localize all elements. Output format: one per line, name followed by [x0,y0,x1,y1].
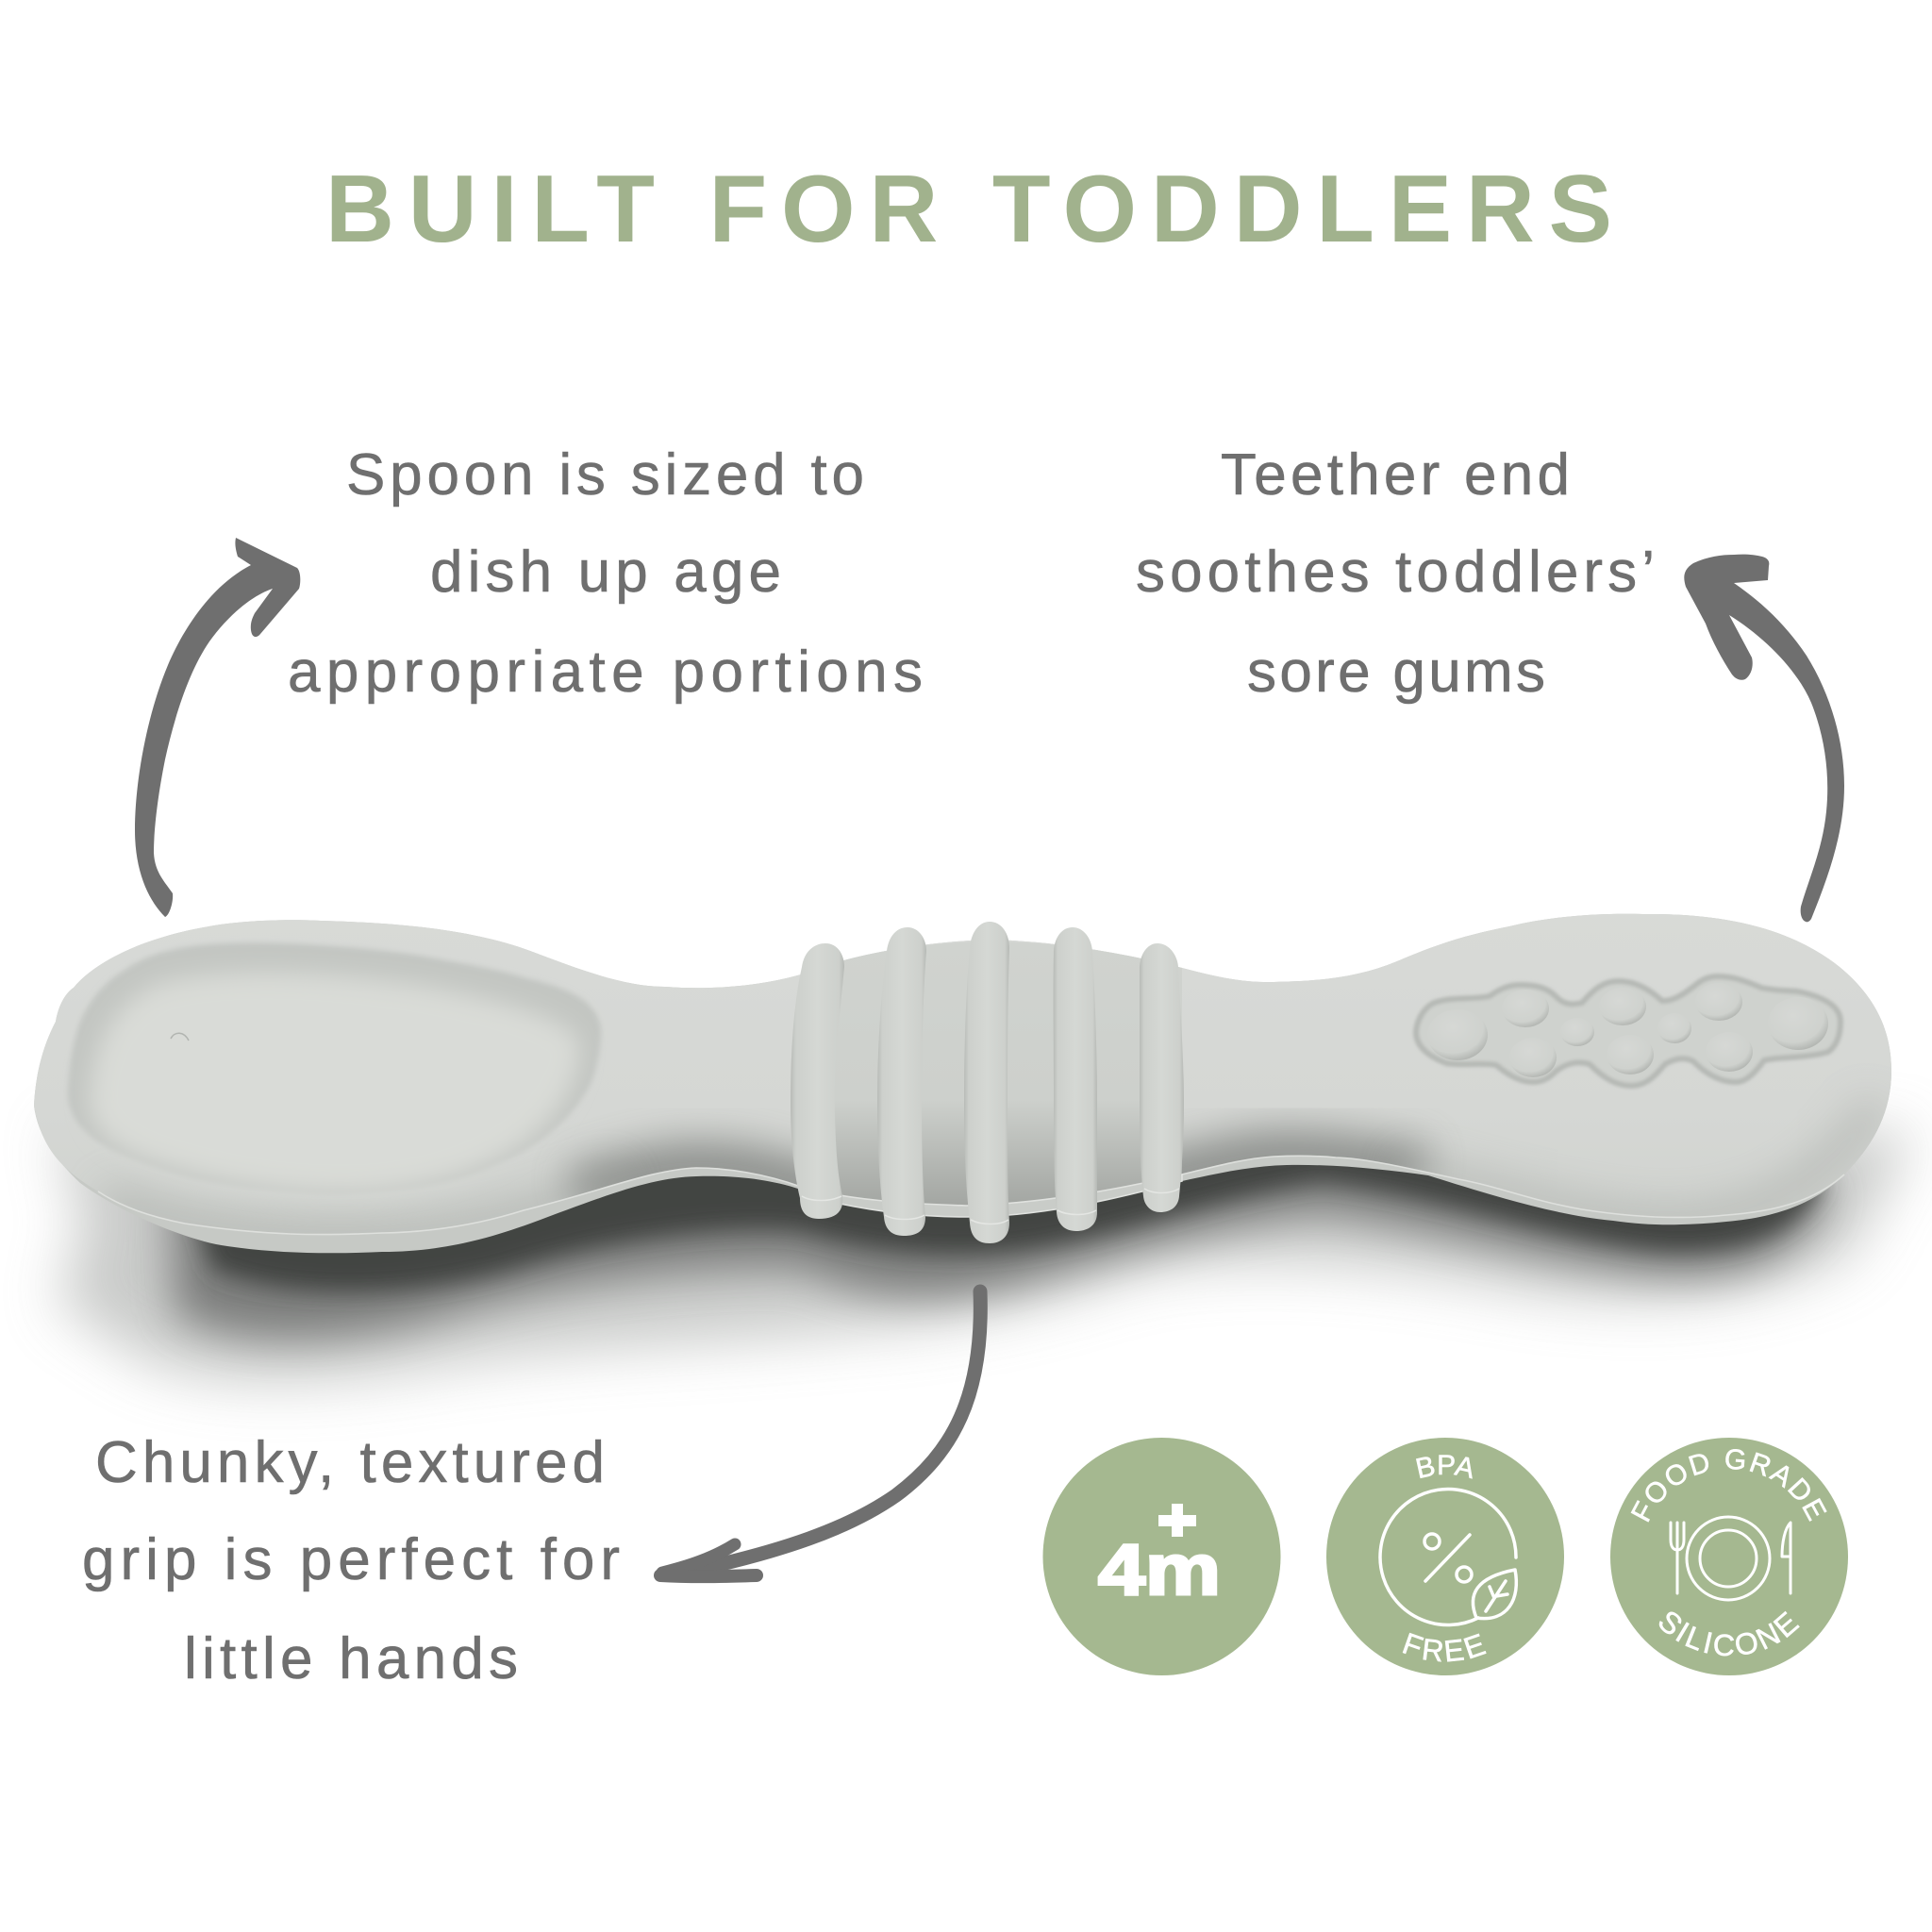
text block: chunky grip: little hands [184,1626,518,1691]
arrow: to teether text [1684,555,1844,922]
grip ribs [791,922,1184,1243]
shadow under spoon [57,1132,1915,1381]
arrow: to spoon text [135,538,300,917]
rim highlight line [98,1156,1844,1235]
bowl interior [68,942,601,1194]
text block: chunky grip: grip is perfect for [82,1527,620,1592]
text block: teether end: Teether end [1221,442,1570,508]
text block: teether end: sore gums [1247,640,1545,705]
badge: food grade silicone: SILICONE [1658,1611,1800,1657]
text block: spoon size: dish up age [430,540,781,605]
badge: BPA free: BPA [1416,1455,1473,1479]
spoon [0,896,1932,1255]
grip body [801,941,1182,1206]
badge: 4m+ [1043,1438,1281,1675]
badge: BPA free: FREE [1402,1632,1487,1662]
icon: percent circle with leaf [1380,1490,1516,1625]
rib rim lines [802,1189,1179,1224]
text block: teether end [1136,442,1655,705]
text block: spoon size: Spoon is sized to [346,442,864,508]
badge: food grade silicone: FOOD GRADE [1630,1449,1827,1523]
arrow: to grip text [660,1291,980,1576]
grip lower band [801,1174,1182,1217]
icon: plate and cutlery [1671,1517,1790,1600]
text block: chunky grip: Chunky, textured [95,1430,605,1495]
badge: food grade silicone [1610,1438,1848,1675]
text block: spoon size: appropriate portions [288,640,923,705]
teether recess [1416,976,1840,1086]
title: BUILT FOR TODDLERS [325,157,1612,262]
spoon upper surface [34,914,1891,1204]
text block: teether end: soothes toddlers’ [1136,540,1655,605]
underside shading near the rim [575,1157,1424,1205]
infographic canvas [34,175,1924,1679]
badge: BPA free [1326,1438,1564,1675]
badge: 4m+: 4m [1098,1530,1221,1610]
teether bumps [1427,983,1828,1077]
spoon underside [34,914,1891,1253]
text block: chunky grip [82,1430,620,1691]
text block: spoon size [288,442,923,705]
